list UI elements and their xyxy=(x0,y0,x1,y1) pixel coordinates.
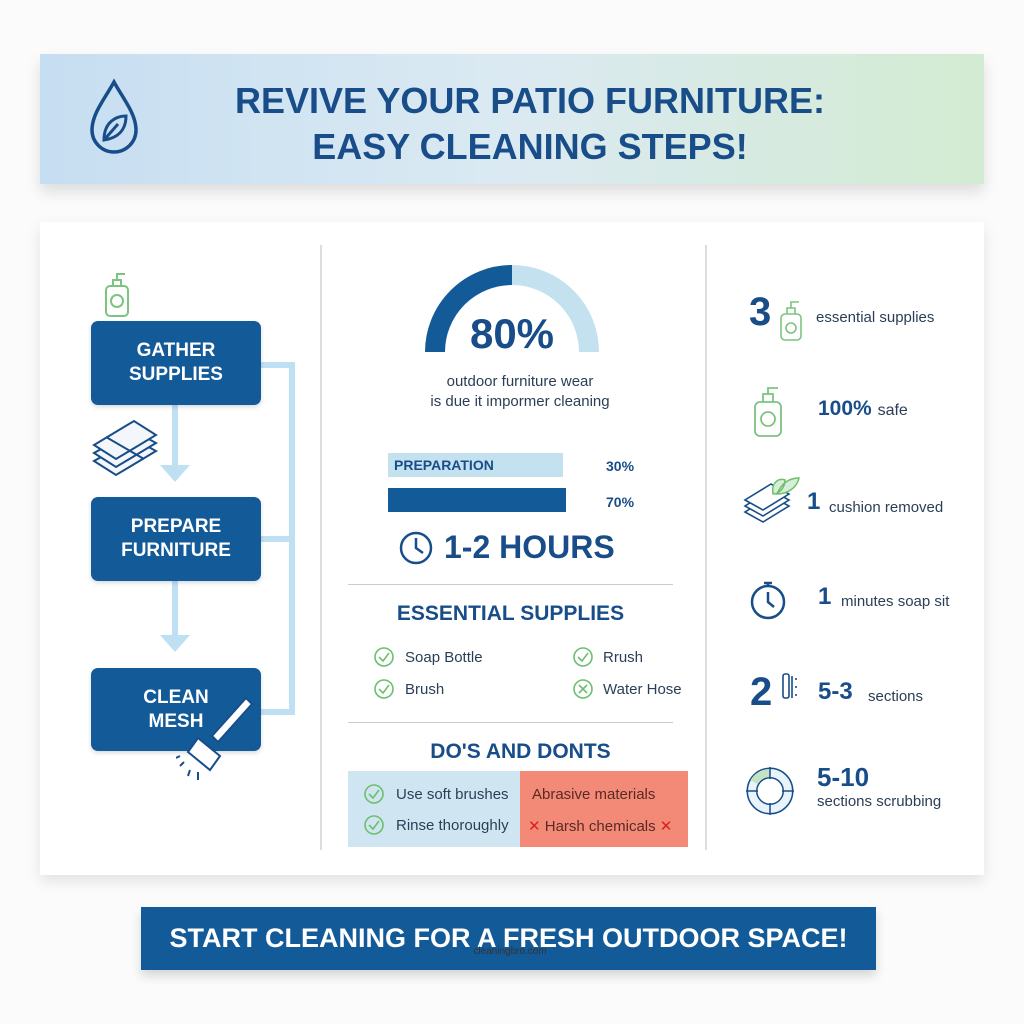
dos and donts heading: DO'S AND DONTS xyxy=(430,740,611,763)
supplies checklist xyxy=(374,647,682,699)
icon: water drop with leaf xyxy=(90,78,138,154)
title xyxy=(235,80,825,167)
panel: quick stats: 5-10 xyxy=(817,762,869,792)
panel: steps flow xyxy=(92,273,295,715)
bar chart: PREPARATION xyxy=(394,457,494,473)
panel: quick stats: 100% safe xyxy=(818,397,908,420)
title: EASY CLEANING STEPS! xyxy=(312,126,748,167)
step: gather supplies: GATHER xyxy=(137,340,215,361)
panel: quick stats xyxy=(744,290,950,815)
header banner xyxy=(40,54,984,184)
watermark: cleaningbro.com xyxy=(473,946,547,957)
panel: quick stats: essential supplies xyxy=(816,309,934,326)
stat: sections scrubbing xyxy=(746,767,794,815)
step: clean mesh: CLEAN xyxy=(143,686,209,708)
panel: quick stats: cushion removed xyxy=(829,499,943,516)
dos and donts table: Rinse thoroughly xyxy=(396,817,509,834)
dos and donts table: Use soft brushes xyxy=(396,786,509,803)
title: REVIVE YOUR PATIO FURNITURE: xyxy=(235,80,825,121)
step: prepare furniture xyxy=(91,497,261,581)
step: clean mesh: MESH xyxy=(149,710,203,732)
essential supplies heading: ESSENTIAL SUPPLIES xyxy=(397,602,624,625)
time estimate: 1-2 HOURS xyxy=(444,529,615,565)
bar chart: 70% xyxy=(606,494,634,510)
supplies checklist: Brush xyxy=(405,681,444,698)
panel: quick stats: 1 xyxy=(807,488,820,515)
gauge caption: is due it impormer cleaning xyxy=(430,393,610,410)
icon: brush xyxy=(176,696,253,780)
supplies checklist: Water Hose xyxy=(603,681,682,698)
panel: quick stats: 1 xyxy=(818,583,831,610)
supplies checklist: Rrush xyxy=(603,649,643,666)
bar chart xyxy=(388,453,634,512)
dos and donts table: ✕ Harsh chemicals ✕ xyxy=(528,818,672,835)
footer banner xyxy=(141,907,876,970)
supplies checklist: Soap Bottle xyxy=(405,649,483,666)
icon: soap bottle xyxy=(105,273,129,317)
stat: minutes soap sit xyxy=(750,582,786,620)
step: prepare furniture: FURNITURE xyxy=(121,540,231,561)
connectors xyxy=(160,362,295,715)
gauge chart xyxy=(425,265,599,352)
icon: stacked towels xyxy=(92,420,158,476)
panel: quick stats: minutes soap sit xyxy=(841,593,949,610)
step: gather supplies: SUPPLIES xyxy=(129,364,223,385)
gauge caption xyxy=(430,373,610,410)
panel: quick stats: 5-3 xyxy=(818,678,853,705)
step: prepare furniture: PREPARE xyxy=(131,516,221,537)
gauge caption: outdoor furniture wear xyxy=(447,373,593,390)
bar chart: 30% xyxy=(606,458,634,474)
panel: quick stats: sections scrubbing xyxy=(817,793,941,810)
stat: cushion removed xyxy=(744,477,800,523)
dos and donts table xyxy=(348,771,688,847)
step: clean mesh xyxy=(91,668,261,751)
stat: essential supplies: 3 xyxy=(749,290,771,334)
footer banner: START CLEANING FOR A FRESH OUTDOOR SPACE! xyxy=(170,923,848,953)
stat: sections: 2 xyxy=(750,670,772,714)
step: gather supplies xyxy=(91,321,261,405)
dos and donts table: Abrasive materials xyxy=(532,786,655,803)
gauge value: 80% xyxy=(470,310,554,357)
panel: quick stats: sections xyxy=(868,688,923,705)
main panel xyxy=(40,222,984,875)
stat: safe xyxy=(754,387,782,437)
